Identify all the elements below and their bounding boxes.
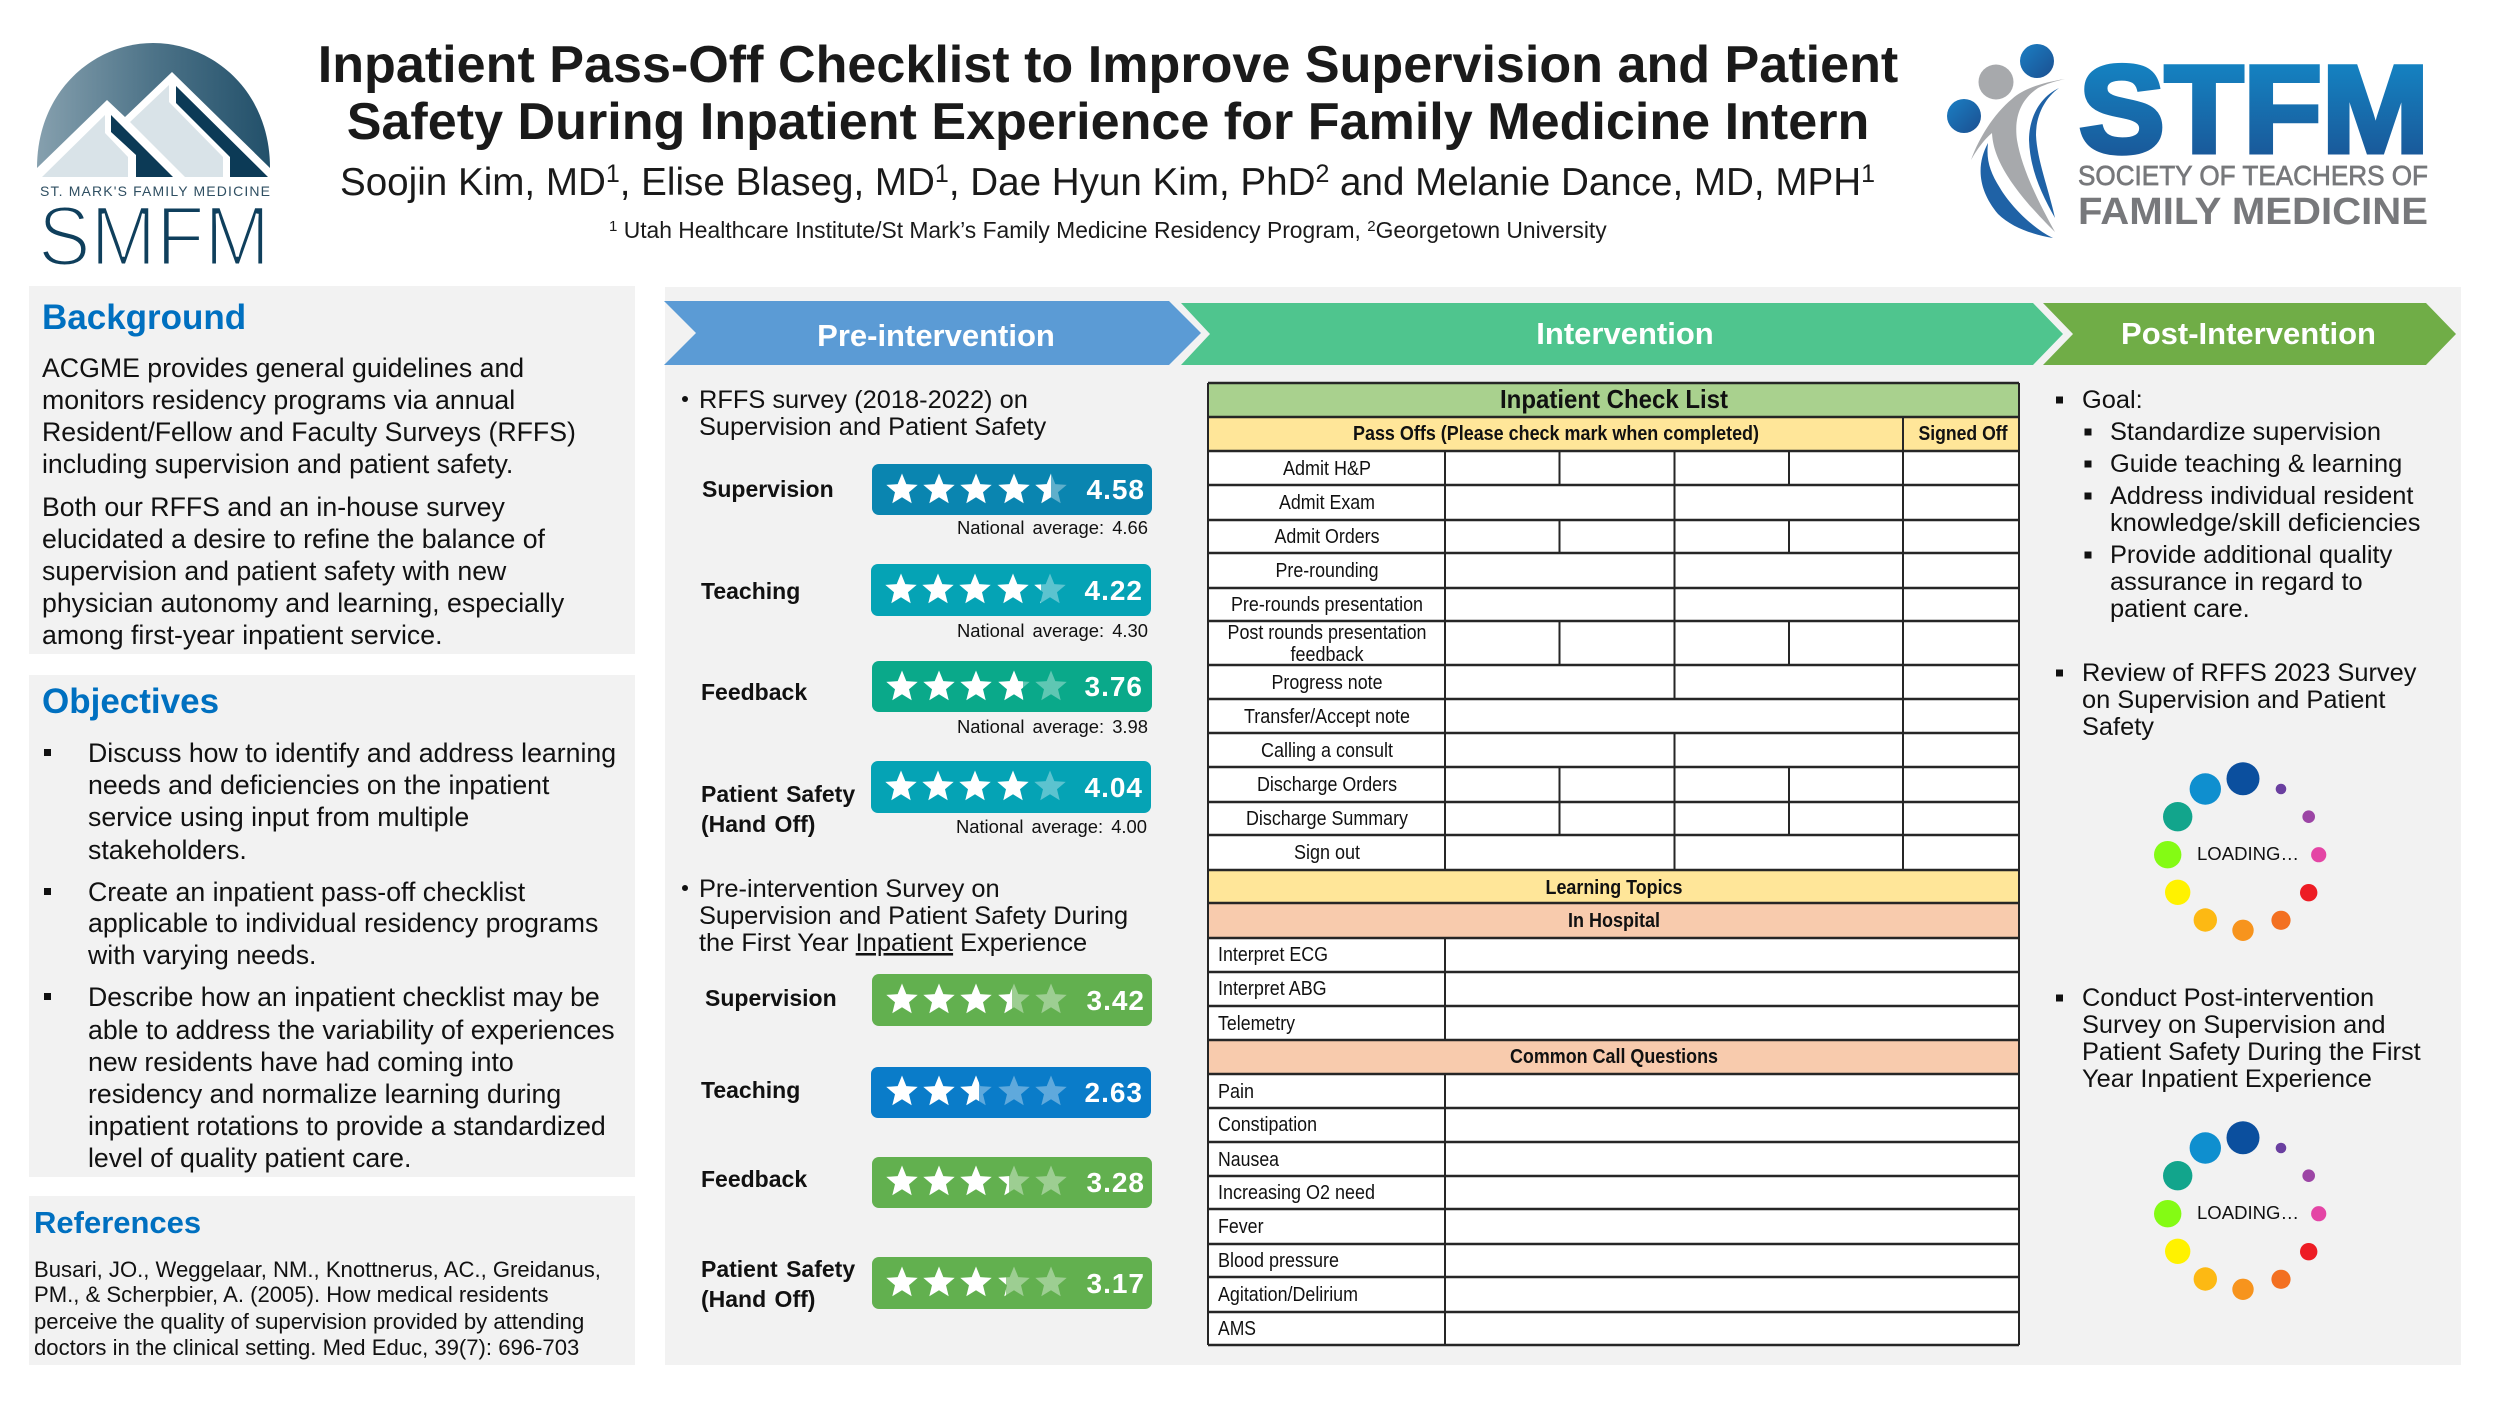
panel: main process (664, 287, 2461, 1365)
text: review survey: Safety (2082, 713, 2154, 741)
authors: 1 (606, 160, 620, 188)
common call items: Increasing O2 need (1218, 1182, 1375, 1204)
checklist items: Post rounds presentation (1228, 622, 1426, 644)
authors: 1 (1861, 160, 1875, 188)
checklist items: feedback (1290, 644, 1364, 666)
label: teaching: Teaching (701, 1077, 800, 1103)
objective list: able to address the variability of experiences (88, 1015, 615, 1045)
checklist items: Admit Orders (1274, 526, 1380, 548)
objective list: stakeholders. (88, 835, 247, 865)
table column heading: pass offs: Pass Offs (Please check mark when completed) (1353, 423, 1759, 445)
objective list: new residents have had coming into (88, 1047, 514, 1077)
text block: background: monitors residency programs via annual (42, 385, 515, 415)
checklist items: Progress note (1272, 672, 1382, 694)
icon: loading spinner 2 (2154, 1121, 2326, 1300)
common call items: AMS (1218, 1318, 1256, 1340)
objective list (44, 738, 616, 1173)
rating: teaching 2.63: 2.63 (1084, 1077, 1143, 1108)
rating: supervision 3.42 (872, 974, 1152, 1026)
label: patient safety (701, 781, 855, 837)
logo: STFM (1947, 41, 2429, 238)
authors: and Melanie Dance, MD, MPH (1329, 161, 1861, 204)
in hospital items: Telemetry (1218, 1013, 1295, 1035)
common call items: Constipation (1218, 1114, 1317, 1136)
in hospital items: Interpret ABG (1218, 978, 1327, 1000)
heading: objectives: Objectives (42, 682, 219, 721)
text block: background: elucidated a desire to refine the balance of (42, 524, 546, 554)
objective list: applicable to individual residency programs (88, 908, 598, 938)
note: national average 3.98: National average: 3.98 (957, 716, 1148, 737)
text block: background: physician autonomy and learning, especially (42, 588, 565, 618)
text block: background (42, 353, 576, 650)
heading: background: Background (42, 298, 246, 337)
checklist items: Admit Exam (1279, 492, 1375, 514)
checklist items: Discharge Orders (1257, 774, 1397, 796)
table heading: Inpatient Check List (1500, 384, 1728, 414)
text: post-intervention survey (2056, 984, 2421, 1093)
affiliations: Georgetown University (1376, 217, 1607, 243)
rating: feedback 3.28: 3.28 (1086, 1167, 1145, 1198)
title: Safety During Inpatient Experience for Family Medicine Intern (347, 93, 1869, 151)
rating: supervision 4.58: 4.58 (1086, 474, 1145, 505)
note: national average 4.66: National average: 4.66 (957, 517, 1148, 538)
logo: STFM: STFM (2079, 41, 2429, 179)
note: national average 4.00: National average: 4.00 (956, 816, 1147, 837)
rating: feedback 3.76 (872, 661, 1152, 712)
rating: teaching 4.22 (871, 564, 1151, 616)
common call items: Nausea (1218, 1149, 1280, 1171)
table: inpatient check list (1208, 383, 2019, 1345)
note: national average 4.30: National average: 4.30 (957, 620, 1148, 641)
text: pre-intervention survey (682, 875, 1128, 957)
label: teaching: Teaching (701, 578, 800, 604)
panel: objectives (29, 675, 635, 1177)
arrow: post-intervention (2043, 303, 2456, 365)
label: patient safety (701, 1256, 855, 1312)
label: supervision: Supervision (702, 476, 834, 502)
objective list: Create an inpatient pass-off checklist (88, 877, 526, 907)
objective list: level of quality patient care. (88, 1143, 411, 1173)
text: pre-intervention survey: Supervision and Patient Safety During (699, 902, 1128, 930)
rating: teaching 4.22: 4.22 (1084, 575, 1143, 606)
text: RFFS survey: RFFS survey (2018-2022) on (699, 386, 1028, 414)
text: pre-intervention survey: the First Year Inpatient Experience (699, 929, 1087, 957)
text block: background: including supervision and patient safety. (42, 449, 513, 479)
objective list: service using input from multiple (88, 802, 469, 832)
icon: loading spinner 1: LOADING… (2197, 843, 2299, 864)
heading: references: References (34, 1205, 201, 1240)
logo: STFM: SOCIETY OF TEACHERS OF (2078, 160, 2428, 191)
checklist items: Pre-rounding (1276, 560, 1378, 582)
text: pre-intervention survey: Pre-intervention Survey on (699, 875, 1000, 903)
common call items: Agitation/Delirium (1218, 1284, 1358, 1306)
title (318, 36, 1898, 151)
arrow: post-intervention: Post-Intervention (2121, 316, 2376, 351)
checklist items (1228, 458, 1426, 864)
text: review survey: Review of RFFS 2023 Survey (2082, 659, 2417, 687)
affiliations: 2 (1367, 218, 1376, 235)
objective list: Discuss how to identify and address learning (88, 738, 616, 768)
label: feedback: Feedback (701, 1166, 807, 1192)
arrow: pre-intervention (664, 301, 1201, 365)
common call items: Blood pressure (1218, 1250, 1339, 1272)
checklist items: Discharge Summary (1246, 808, 1408, 830)
text: post-intervention survey: Survey on Supervision and (2082, 1011, 2385, 1039)
arrow: intervention (1181, 303, 2063, 365)
authors: Soojin Kim, MD (340, 161, 606, 204)
text: post-intervention survey: Patient Safety During the First (2082, 1038, 2421, 1066)
authors: , Elise Blaseg, MD (620, 161, 935, 204)
logo: St. Mark's Family Medicine (37, 43, 270, 283)
text: RFFS survey: Supervision and Patient Safety (699, 413, 1047, 441)
rating: feedback 3.28 (872, 1157, 1152, 1208)
objective list: residency and normalize learning during (88, 1079, 561, 1109)
rating: patient safety 4.04: 4.04 (1084, 772, 1143, 803)
rating: supervision 4.58 (872, 464, 1152, 515)
text: RFFS survey (682, 386, 1047, 441)
rating: patient safety 4.04 (871, 761, 1151, 813)
section heading: in hospital: In Hospital (1568, 910, 1660, 932)
icon: loading spinner 2: LOADING… (2197, 1202, 2299, 1223)
objective list: with varying needs. (87, 940, 316, 970)
authors: , Dae Hyun Kim, PhD (949, 161, 1315, 204)
authors: 1 (935, 160, 949, 188)
label: supervision: Supervision (705, 985, 837, 1011)
in hospital items (1218, 944, 1328, 1035)
logo: STFM: FAMILY MEDICINE (2078, 191, 2428, 233)
icon: loading spinner 1 (2154, 762, 2326, 941)
table column heading: signed off: Signed Off (1918, 423, 2008, 445)
affiliations: 1 (609, 218, 617, 235)
text: goals: Address individual resident (2110, 482, 2413, 510)
arrow: intervention: Intervention (1536, 316, 1714, 351)
text: post-intervention survey: Year Inpatient Experience (2082, 1065, 2372, 1093)
rating: feedback 3.76: 3.76 (1084, 671, 1143, 702)
text: review survey (2056, 659, 2417, 741)
checklist items: Admit H&P (1283, 458, 1371, 480)
reference text (34, 1257, 601, 1360)
text: review survey: on Supervision and Patient (2082, 686, 2386, 714)
reference text: Busari, JO., Weggelaar, NM., Knottnerus, AC., Greidanus, (34, 1257, 601, 1282)
text: goals (2056, 386, 2420, 623)
objective list: inpatient rotations to provide a standardized (88, 1111, 606, 1141)
common call items: Fever (1218, 1216, 1264, 1238)
text: goals: Provide additional quality (2110, 541, 2393, 569)
text block: background: supervision and patient safety with new (42, 556, 507, 586)
grid lines (1208, 383, 2019, 1345)
label: patient safety: Patient Safety (701, 781, 855, 807)
reference text: perceive the quality of supervision provided by attending (34, 1309, 584, 1334)
label: patient safety: Patient Safety (701, 1256, 855, 1282)
logo: St. Mark's Family Medicine: SMFM (38, 189, 270, 283)
text block: background: ACGME provides general guidelines and (42, 353, 524, 383)
panel: references (29, 1196, 635, 1365)
rating: supervision 3.42: 3.42 (1086, 985, 1145, 1016)
text: post-intervention survey: Conduct Post-intervention (2082, 984, 2374, 1012)
in hospital items: Interpret ECG (1218, 944, 1328, 966)
label: patient safety: (Hand Off) (701, 811, 815, 837)
section heading: common call questions: Common Call Questions (1510, 1046, 1718, 1068)
text block: background: Resident/Fellow and Faculty Surveys (RFFS) (42, 417, 576, 447)
text: goals: Standardize supervision (2110, 418, 2381, 446)
affiliations: Utah Healthcare Institute/St Mark’s Family Medicine Residency Program, (617, 217, 1367, 243)
rating: patient safety 3.17: 3.17 (1086, 1268, 1145, 1299)
text: goals: assurance in regard to (2110, 568, 2363, 596)
checklist items: Sign out (1294, 842, 1360, 864)
text: goals: patient care. (2110, 595, 2250, 623)
objective list: Describe how an inpatient checklist may be (88, 982, 600, 1012)
objective list: needs and deficiencies on the inpatient (88, 770, 550, 800)
panel: background (29, 286, 635, 654)
text block: background: among first-year inpatient service. (42, 620, 442, 650)
text: goals: Goal: (2082, 386, 2143, 414)
rating: patient safety 3.17 (872, 1257, 1152, 1309)
common call items: Pain (1218, 1081, 1254, 1103)
reference text: doctors in the clinical setting. Med Educ, 39(7): 696-703 (34, 1335, 579, 1360)
text: goals: knowledge/skill deficiencies (2110, 509, 2420, 537)
section heading: learning topics: Learning Topics (1546, 877, 1682, 899)
checklist items: Pre-rounds presentation (1231, 594, 1423, 616)
common call items (1218, 1081, 1375, 1340)
checklist items: Transfer/Accept note (1244, 706, 1410, 728)
authors: 2 (1315, 160, 1329, 188)
text: goals: Guide teaching & learning (2110, 450, 2402, 478)
text block: background: Both our RFFS and an in-house survey (42, 492, 505, 522)
arrow: pre-intervention: Pre-intervention (817, 318, 1055, 353)
checklist items: Calling a consult (1261, 740, 1393, 762)
label: patient safety: (Hand Off) (701, 1286, 815, 1312)
label: feedback: Feedback (701, 679, 807, 705)
rating: teaching 2.63 (871, 1067, 1151, 1118)
title: Inpatient Pass-Off Checklist to Improve Supervision and Patient (318, 36, 1898, 94)
logo: St. Mark's Family Medicine: ST. MARK'S FAMILY MEDICINE (40, 183, 270, 199)
reference text: PM., & Scherpbier, A. (2005). How medical residents (34, 1282, 549, 1307)
